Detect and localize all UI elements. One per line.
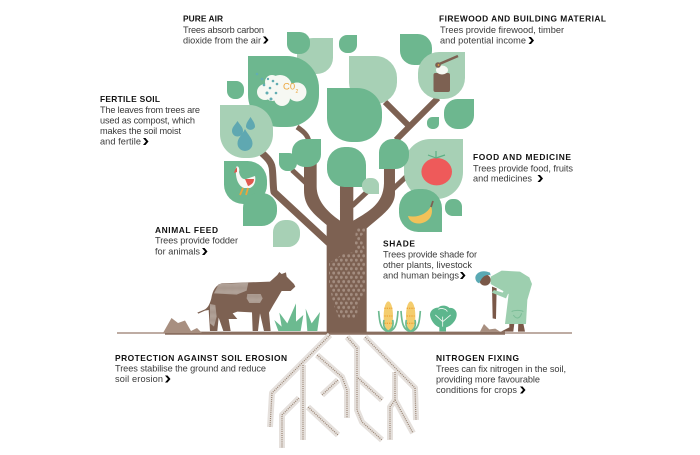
icon: CO2 cloud: 2 [296,89,298,95]
leaf: small top left [297,38,333,74]
text: fertile soil: used as compost, which [100,116,195,126]
text: pure air: dioxide from the air [183,35,261,45]
leaf: small centre light [362,178,379,194]
icon: CO2 cloud [256,73,306,106]
leaf: lower left light [273,220,300,247]
icon: cow [197,272,295,331]
icon: water drops [232,117,255,151]
text: pure air: PURE AIR [183,14,223,24]
roots [270,335,416,448]
leaf: middle left dark [292,139,321,167]
icon: grass [274,303,320,331]
text: shade: other plants, livestock [383,260,472,270]
leaf: lower left dark [243,193,277,226]
text: shade: Trees provide shade for [383,250,477,260]
arrow [263,36,268,44]
text: fertile soil: FERTILE SOIL [100,94,160,104]
leaf: light centre [349,56,397,104]
leaf: firewood [418,52,465,99]
icon: banana [408,201,433,224]
icon: tomato [421,151,452,185]
text: protection against soil erosion [115,353,287,384]
leaf: top centre small [339,35,357,53]
text: shade: and human beings [383,270,459,280]
arrow [202,248,208,255]
ground line [117,332,572,334]
text: food and medicine: Trees provide food, fruits [473,164,573,174]
text: firewood and building material [439,14,606,46]
tree trunk and branches [262,98,438,333]
text: animal feed: for animals [155,246,200,256]
icon: cabbage [430,306,457,331]
icon: farmer [475,271,532,332]
arrow [528,37,534,44]
arrow [520,386,526,394]
text: shade [383,239,477,280]
text: fertile soil: makes the soil moist [100,126,181,136]
leaf: carbon dioxide [248,56,319,127]
arrow [143,138,148,145]
leaf: food light [404,139,463,199]
text: fertile soil: and fertile [100,136,141,146]
text: protection against soil erosion: soil erosion [115,374,163,384]
text: nitrogen fixing: providing more favourable [436,374,540,384]
leaf: top small dark [287,32,310,54]
text: animal feed: Trees provide fodder [155,236,238,246]
soil mound left [163,318,202,333]
corn cob two [401,301,420,331]
corn cob one [379,301,398,331]
leaf: banana [399,189,442,232]
text: firewood and building material: FIREWOOD AND BUILDING MATERIAL [439,14,606,24]
leaf: water [220,105,273,158]
leaf overlaps [224,32,442,232]
text: nitrogen fixing [436,353,566,395]
icon: chicken [234,166,255,195]
leaf: middle right dark [379,139,409,169]
icon: firewood stump and axe [434,56,458,92]
icon: corn [379,301,420,331]
text: pure air [183,14,268,45]
leaf: top right dark [400,34,432,65]
arrow [460,272,466,279]
arrow [538,175,543,182]
text: shade: SHADE [383,239,415,249]
leaf: small lower right [445,199,462,216]
text: nitrogen fixing: conditions for crops [436,385,517,395]
leaf: chicken [224,161,267,204]
text: animal feed [155,225,238,256]
leaf: middle left small [279,153,297,171]
text: food and medicine: and medicines [473,174,532,184]
text: fertile soil: The leaves from trees are [100,105,200,115]
leaf: right small [427,117,439,129]
leaf: right dark [444,99,474,129]
arrow [165,376,170,382]
text: food and medicine: FOOD AND MEDICINE [473,152,571,162]
text: protection against soil erosion: Trees stabilise the ground and reduce [115,364,266,374]
text: firewood and building material: Trees provide firewood, timber [440,25,564,35]
text: food and medicine [473,152,573,184]
text: pure air: Trees absorb carbon [183,25,264,35]
leaf: large centre [327,88,382,142]
text: animal feed: ANIMAL FEED [155,225,218,235]
leaves [220,32,474,247]
leaf: centre rounded [327,147,366,187]
text: nitrogen fixing: Trees can fix nitrogen in the soil, [436,364,566,374]
text: fertile soil [100,94,200,146]
leaf: left small [227,81,244,99]
text: protection against soil erosion: PROTECTION AGAINST SOIL EROSION [115,353,287,363]
text: firewood and building material: and potential income [440,36,526,46]
text: nitrogen fixing: NITROGEN FIXING [436,353,519,363]
icon: CO2 cloud: C0 [283,82,295,92]
